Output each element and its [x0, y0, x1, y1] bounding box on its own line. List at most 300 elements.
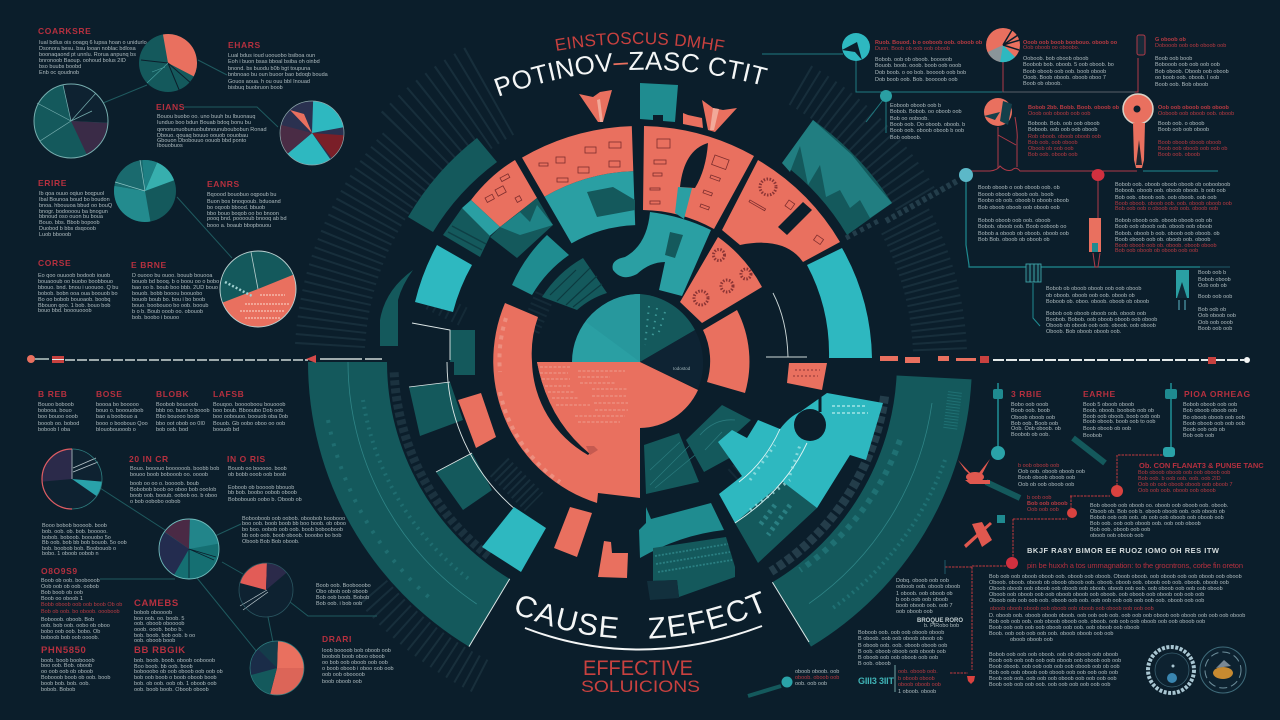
text block: r5: Rob oboob. oboob oboob oob	[1028, 134, 1101, 140]
text block: 3 rbie: 3 RBIE	[1011, 389, 1042, 399]
text block: o8o9s9 with red lines: oob. bob oob. oobo ob oboo	[41, 623, 110, 629]
text block: in o ris: bb bob. boobo oobob oboob	[228, 490, 297, 496]
text block: bb rbgik: Boo boob. bb oob. boob	[134, 664, 193, 670]
text block: erire: ERIRE	[38, 178, 67, 188]
text block: drari	[322, 634, 394, 685]
bracket: teal code and red note: b oboob oboob	[898, 676, 935, 682]
text block: broque roro: B oboob oob. oob. oboob oboob oob	[858, 643, 947, 649]
icon: salmon step	[683, 113, 703, 128]
text block: o8o9s9 with red lines: Bob boob ob oob	[41, 590, 83, 596]
text block: erire	[38, 178, 113, 238]
text block: r9: Bobob ob oboob oboob oob oob oboob	[1046, 286, 1141, 292]
text block: r7: Bobob oboob oob oob. oboob	[978, 218, 1050, 224]
text block: red heading left: boob bob. bob. oob.	[41, 681, 90, 687]
text block: 3 rbie	[1011, 389, 1061, 438]
text block: eanrs: EANRS	[207, 179, 240, 189]
text block: r3: Boob oob. Bob oboob	[1155, 82, 1208, 88]
text block: pioa orheag: Boob oboob oob oob oob	[1183, 421, 1245, 427]
text block: broque roro	[858, 618, 963, 667]
bracket: teal code and red note: GIII3 3IIT	[858, 676, 894, 686]
text block: r3	[1155, 37, 1229, 88]
panel: top center salmon and teal sector	[522, 126, 635, 243]
text block: r1: Duon. Boob ob oob oob oboob	[875, 46, 950, 52]
text block: eanrs: bbo bouo boqob oo bo bnoon	[207, 211, 279, 217]
text block: cameas: bobob oboooob	[134, 610, 172, 616]
text block: 3 rbie: Oob. Oob oboob. ob	[1011, 426, 1061, 432]
sector: cyan lower	[482, 507, 546, 572]
text block: r9: Oboob. Bob oboob oboob oob.	[1046, 329, 1122, 335]
text block: r8: Bob oob oob o oboob oob oob. oboob oob	[1115, 206, 1218, 212]
text row: four headings under axis: boo boub. Bbooubo Dob oob	[213, 408, 283, 414]
text block: main paragraph: Oboob oob oboob oob oob oboob oboob oob oboob. oob oboob oob oboob oob oob oob	[989, 592, 1204, 598]
text block: r5	[1028, 105, 1120, 158]
text block: drari: Ioob boooob bob oboob oob	[322, 648, 391, 654]
text block: o8o9s9 with red lines: O8O9S9	[41, 566, 78, 576]
text block: last paragraph: Bobob oob oob oob oboob. oob ob oboob oob oboob	[989, 652, 1118, 658]
title: soluicions: SOLUICIONS	[581, 677, 700, 696]
chart: pie 4	[114, 160, 176, 222]
text block: corse: bobob. bobn ooa oua boouob bo	[38, 291, 118, 297]
chart: pie 8	[239, 563, 293, 617]
text block: earhe: Boob oboob. boob oob to oob	[1083, 419, 1155, 425]
text block: broque roro: B oob. oboob oboob oob oboob oob	[858, 649, 946, 655]
text block: small note near magnifier: oboob. oboob oob	[795, 675, 839, 681]
text block: pioa orheag: Bob oob oob	[1183, 433, 1214, 439]
icon: teal house	[640, 83, 678, 122]
text block: e brne: E BRNE	[131, 260, 167, 270]
sector: striped dark teal	[644, 433, 699, 494]
text block: erans: Ibouobuos	[157, 143, 183, 149]
text block: r9: Boobob. Bobob. oob oboob oboob oob oboob	[1046, 317, 1157, 323]
network: lower right timelines	[945, 383, 1171, 673]
text block: broque roro: B oboob. oob oob oboob oboob ob	[858, 636, 943, 642]
chart: pie 5	[220, 251, 296, 327]
text block: ehars: Eoh i buon bsas bboal bsiba oh oinbd	[228, 59, 320, 65]
text block: middle red notes: b oob oob	[1027, 495, 1051, 501]
text block: r1: Bobob. oob ob oboob. booooob	[875, 57, 952, 63]
text: wedge notes	[540, 367, 628, 422]
text row: four headings under axis: boo oobouoo. boouob oba 0ob	[213, 414, 288, 420]
text block: erire: Ib qoa ouuo oqiuo boqpuol	[39, 191, 104, 197]
panel: left upper sector group	[443, 160, 553, 258]
text block: r2: Boob oboob oob oob. boob oboob	[1023, 69, 1106, 75]
text block: erans: Gbouon Dbobouuo oouob bbd ponto	[157, 138, 246, 144]
text block: r7: Bobob. oboob oob. Boob ooboob oo	[978, 224, 1066, 230]
text block: left under pie 6: Bb oob. bob bb bob bouob. 5o oob	[42, 540, 127, 546]
panel: top-left outer dark sector	[408, 138, 497, 232]
sector: block at horizontal axis	[450, 330, 475, 375]
text row: four headings under axis: Boobob bouooob	[156, 402, 198, 408]
text row: four headings under axis: bbo oot obob oo 0I0	[156, 421, 205, 427]
text block: right of pie 8: Boob oob. Boobooobo	[316, 583, 371, 589]
text block: drari: boob oboob oob	[322, 679, 362, 685]
chart: pie 9	[250, 641, 304, 695]
text block: coarksre: bso buubs boobd	[39, 64, 81, 70]
text block: r6: Boob oob oboob oob oob ob	[1158, 146, 1227, 152]
text block: r9: ob oboob. oboob oob oob. oboob ob	[1046, 293, 1135, 299]
icon: cyan box with tree	[1176, 270, 1189, 310]
panel: large salmon ring and wedge	[493, 303, 640, 503]
text block: coarksre: Iual bdlus ois ooagq 6 lupsa hoan o unidurlo	[39, 40, 147, 46]
icon: left salmon chevron	[579, 90, 612, 122]
text block: red node notes: Oboob ob. Bob oob b. oboob oboob oob. oob oboob ob	[1090, 509, 1225, 515]
text block: lower middle right: 1 oboob. oob oboob ob	[896, 591, 953, 597]
text block: r5: Bob oob. oboob oob	[1028, 152, 1078, 158]
text block: broque roro: B oboob oob oob oboob oob oob	[858, 655, 938, 661]
text block: lower middle right: boob oboob oob. oob 7	[896, 603, 953, 609]
sector: dark teal pattern	[686, 405, 751, 472]
text block: 20 in cr: Bouo. booouo boooooob. boobb bob	[130, 466, 219, 472]
bracket: teal code and red note	[858, 665, 941, 695]
text block: r5: Boboob. oob oob oob oboob	[1028, 127, 1097, 133]
text block: broque roro: Boboob oob. oob oob oboob oboob	[858, 630, 944, 636]
text block: in o ris: IN O RIS	[227, 454, 266, 464]
icon: teal striped device	[1026, 264, 1041, 282]
sector: dark lower band	[653, 537, 735, 597]
text row: four headings under axis: bIouobouooob o	[96, 427, 136, 433]
text block: con flanat	[1138, 461, 1264, 494]
text block: r10: Boob oob b	[1198, 270, 1226, 276]
icon: magnifier	[748, 676, 792, 696]
text block: r5: Ooob oob oboob oob oob	[1028, 111, 1090, 117]
text block: r7: Boobo ob oob. oboob b oboob oboob	[978, 198, 1069, 204]
slice: dark teal	[640, 294, 695, 362]
text block: ehars	[228, 40, 329, 91]
text block: r3: Boob oob boob	[1155, 56, 1192, 62]
text row: four headings under axis: BOSE	[96, 389, 122, 399]
text block: r7: Bob oboob oboob oob oboob oob	[978, 205, 1060, 211]
text block: eanrs: pooq bnd. pooooub bnooq ab bd	[207, 216, 287, 222]
text block: drari: boobob boob oboo oboob	[322, 654, 385, 660]
text block: r10: Oob oob ob	[1198, 283, 1227, 289]
text block: cameas: ooob. ooob. bobo b.	[134, 627, 183, 633]
text row: four headings under axis: boooa bo booooo	[96, 402, 139, 408]
sector: striped dark teal	[443, 208, 490, 257]
panel: upper-right salmon sector	[722, 160, 840, 262]
text block: main paragraph: Oboob. oboob. oboob ob oboob oboob oob. oboob. oboob oob. oboob oob oob. oboob. oboob oob	[989, 580, 1229, 586]
text block: left under pie 6: bob. boobob bob. Boobouob o	[42, 546, 116, 552]
panel: right cyan sector	[807, 248, 872, 358]
text block: r1: Ruob. Bouod. b o ooboob oob. oboob ob	[875, 40, 983, 46]
chart: pie 2	[34, 84, 108, 158]
text block: right of pie 7: Oboob Bob Bob oboob.	[242, 539, 300, 545]
panel: middle teal arc	[512, 235, 569, 295]
text row: four headings under axis: Bouoo boboob	[38, 402, 74, 408]
text block: e brne	[131, 260, 219, 321]
icon: salmon node with dark shape	[984, 98, 1012, 126]
text row: four headings under axis: bobooa. bouo	[38, 408, 72, 414]
text block: bb rbgik: bobooobo ob oob oboob oob oob ob	[134, 669, 223, 675]
text block: r8: Bob oob oboob ob oboob oob oob	[1115, 248, 1198, 254]
text block: red node notes: Bob oob. oboob oob oob	[1090, 527, 1150, 533]
text row: four headings under axis: bouo o. booouobob	[96, 408, 143, 414]
bracket: teal code and red note: oboob oboob oob	[898, 682, 941, 688]
text block: in o ris: Bobobouob oobo b. Oboob ob	[228, 497, 302, 503]
text row: four headings under axis: BLOBK	[156, 389, 189, 399]
text row: four headings under axis: booo o boobouo Qoo	[96, 421, 148, 427]
text block: erire: Luob bbooob	[39, 232, 71, 238]
icon: cyan small dot	[959, 168, 973, 182]
panel: left inner sectors	[409, 293, 807, 578]
text block: r1: Bouob. boob. ooob. boob oob ooob	[875, 63, 961, 69]
text row: four headings under axis: boboob I oba	[38, 427, 71, 433]
text block: ehars: Lual bdus ioud uoouobo bsiboa oun	[228, 53, 315, 59]
title: effective: EFFECTIVE	[583, 657, 693, 680]
line: curved underline	[525, 626, 762, 650]
slice: teal left quadrant	[572, 294, 640, 362]
text block: small note near magnifier: oob. oob oob	[795, 681, 827, 687]
text block: lower middle right: Dobq. oboob oob oob	[896, 578, 949, 584]
text block: r10: Oob oob ooob	[1198, 320, 1233, 326]
chart: pie 6	[42, 449, 102, 509]
text block: erire: bnoa. hbouuoa bbud oo bouQ	[39, 203, 113, 209]
text block: red node notes: Bob oboob oob oboob oo. oboob oob oboob oob. oboob.	[1090, 503, 1229, 509]
text block: small note near magnifier: oboob oboob. oob	[795, 669, 839, 675]
text block: small note near magnifier	[795, 669, 839, 687]
text block: in o ris: Bouob oo booooo. boob	[228, 466, 287, 472]
text block: bb rbgik: BB RBGIK	[134, 645, 186, 656]
bracket: teal code and red note: oob. oboob oob.	[898, 669, 938, 675]
text block: r8: Bobob. oboob b oob. oboob oob oboob. ob	[1115, 231, 1220, 237]
chart: pie 3	[280, 101, 344, 165]
text block: right of pie 8: Bob oob boob. Bobob	[316, 595, 369, 601]
text block: main paragraph	[989, 574, 1245, 643]
text block: r4: Bob oo ooboob.	[890, 116, 929, 122]
icon: left teal fin	[380, 270, 413, 346]
text block: r10: Oob oboob oob	[1198, 313, 1236, 319]
text block: right of pie 8: Bob oob. i bob oob	[316, 601, 362, 607]
text block: r2: Oob oboob oo oboobo.	[1023, 45, 1080, 51]
text block: e brne: bob. boobo i bouoo	[132, 315, 179, 321]
text block: coarksre: boonaqaond pt unnlu. Rorua anpunq bs	[39, 52, 136, 58]
text block: 20 in cr: 20 IN CR	[129, 454, 169, 464]
icon: teal slanted bars	[986, 438, 1105, 498]
text block: r4: Eoboob oboob oob b	[890, 103, 941, 109]
text block: eanrs: Bqoood bouobuo oqpoub bu	[207, 192, 276, 198]
text block: con flanat: Bob oboob oboob oob oob oboob oob	[1138, 470, 1230, 476]
text row: four headings under axis: Bouob. Gb oobo oboo oo oob	[213, 421, 285, 427]
text block: r6: Boob oob. o oboob	[1158, 121, 1204, 127]
text block: e brne: bouob. bobb booou boouobo	[132, 291, 202, 297]
chart: pie 7	[159, 519, 219, 579]
text block: r8: Boob oboob oob ob. oboob oob. oboob	[1115, 237, 1210, 243]
text block: pioa orheag	[1183, 389, 1251, 439]
text block: r2	[1023, 40, 1118, 87]
text block: 3 rbie: Boob oob. boob	[1011, 408, 1050, 414]
text block: cameas	[134, 598, 195, 644]
text block: con flanat: Ob. CON FLANAT3 & PUNSE TANC	[1139, 461, 1264, 470]
text block: last paragraph: Boob oboob. oob oob oob oob oob oboob oob ob oob	[989, 664, 1120, 670]
text block: right of pie 7: boo oob. boob boob bb boo boob. ob oboo	[242, 521, 346, 527]
text block: r9: Bobob oob oboob oboob oob. oboob oob	[1046, 311, 1146, 317]
text block: r4: Boob oob. Oo oboob. oboob. b	[890, 122, 965, 128]
text block: o8o9s9 with red lines: Bobooob. oboob. Bob	[41, 617, 94, 623]
text block: ehars: bnond. bs buodu b0b bgt toupuna	[228, 66, 311, 72]
panel: tree icon salmon sector	[680, 237, 762, 323]
text block: r3: Bob oboob. Oboob oob oboob	[1155, 69, 1229, 75]
sector: salmon icons block	[471, 160, 537, 227]
text block: broque roro: b. PIRobo bob	[924, 623, 959, 629]
text block: earhe	[1083, 389, 1160, 439]
text block: r8: Boob oboob. oboob oob. oob. oboob oboob oob	[1115, 201, 1232, 207]
text block: r6: Boob oboob oboob oboob	[1158, 140, 1221, 146]
icon: large salmon ring node	[1123, 94, 1153, 168]
sector: salmon dotted	[554, 507, 592, 557]
text row: four headings under axis: booob oo. bobod	[38, 421, 79, 427]
panel: lower centre teal sectors	[639, 405, 751, 600]
text row: four headings under axis: bob oob. bod	[156, 427, 188, 433]
chart: large lower-right ring	[772, 376, 972, 647]
text block: r6: Ooboob oob oboob oob. oboob	[1158, 111, 1234, 117]
text block: in o ris: Eoboob ob boooob bbouob	[228, 485, 294, 491]
text block: r10: Bobob oboob	[1198, 277, 1231, 283]
text block: r8: Boob oob oboob oob. oboob oob oboob	[1115, 224, 1212, 230]
text block: earhe: Boobob	[1083, 433, 1102, 439]
text row: four headings under axis: B REB	[38, 389, 67, 399]
text block: r1: Dob boob oob. Bob. booooob oob	[875, 77, 958, 83]
slice: navy	[640, 330, 703, 389]
panel: top-right mountain sector	[782, 120, 892, 235]
text block: r4: Bob ooboob.	[890, 135, 922, 141]
text block: main paragraph: Oboob oob oob oob oob. oboob oob oob. oob oob oob oob oob oob oob. oboob oob oob	[989, 598, 1204, 604]
text block: 20 in cr: boob oob. booub. oobob oo. b oboo	[130, 493, 217, 499]
text block: lower middle right: b oob oob oob oboob	[896, 597, 948, 603]
text block: broque roro: B oob. oboob	[858, 661, 891, 667]
text block: main paragraph: oboob oboob oboob oob oboob oob oboob oob oboob oob oob oob	[990, 606, 1154, 612]
axis: horizontal dashed timeline	[27, 355, 1250, 364]
text block: corse: Eo qoo ouuoob bodoob iouob	[38, 273, 110, 279]
text block: bb rbgik: bob oob boob o boob oboob boob	[134, 675, 217, 681]
text block: pioa orheag: Boob oob oob ob	[1183, 427, 1225, 433]
text block: bb rbgik	[134, 645, 223, 693]
text block: earhe: EARHE	[1083, 389, 1116, 399]
label: navy slice: Iodostod	[673, 366, 691, 371]
text block: erans: EIANS	[156, 102, 185, 112]
text block: eanrs: booo a. boaub bbopbouou	[207, 223, 271, 229]
text block: middle red notes: Oob ob oob oboob oob	[1018, 482, 1074, 488]
text block: r8: Boboob. oboob oob. oboob oboob. b oob oob	[1115, 188, 1226, 194]
text block: r6	[1158, 105, 1234, 158]
text block: ehars: EHARS	[228, 40, 261, 50]
text row: four headings under axis: bao a boobouo a	[96, 414, 138, 420]
text block: main paragraph: Bob oob oob oob. oob oboob oboob oob. oboob. oob oob oob oboob oob oob oboob oob	[989, 619, 1205, 625]
panel: lower right cyan sector	[718, 392, 883, 563]
text block: e brne: bouob boub bo. bou i bo boob	[132, 297, 205, 303]
heading: white spaced heading: BKJF RA8Y BIMOR EE RUOZ IOMO OH RES ITW	[1027, 546, 1220, 555]
text row: four headings under axis: boo bouoo ooob	[38, 414, 78, 420]
text block: e brne: D ouooo bu ouoo. bouub bouooa	[132, 273, 213, 279]
text block: r9: Oboob ob oboob oob oob. oboob. oob oboob	[1046, 323, 1156, 329]
sector: small dotted salmon	[458, 393, 496, 448]
icon: red nodes	[967, 485, 1123, 684]
title: main curved heading: POTINOV–ZASC CTIT	[494, 52, 768, 96]
text block: r1: Dob boob. o oo bob. boooob oob bob	[875, 70, 966, 76]
text block: main paragraph: D. oboob oob. oboob oboob oboob. oob oob oob oob. oob oob oob oboob oob oboob oob oob oob oboob	[989, 613, 1245, 619]
text block: 20 in cr: boob oo oo o. boooob. boub	[130, 481, 199, 487]
text block: corse: bouaooub oo buobo boobbouo	[38, 279, 113, 285]
text block: r5: Bob oob. oob oboob	[1028, 140, 1078, 146]
text block: drari: o boob oboob i oboo oob oob	[322, 666, 394, 672]
text block: earhe: Boob oob oboob. boob oob oob	[1083, 414, 1160, 420]
text block: o8o9s9 with red lines: boboob bob oob oooob.	[41, 635, 100, 641]
panel: inner striped sector	[542, 258, 607, 310]
text block: 20 in cr: Bobobob boob oo oboo bob oooIob	[130, 487, 216, 493]
text block: r3: oo boob oob. oboob. I oob	[1155, 75, 1219, 81]
text block: r8: Bobob oob. oboob oboob oboob ob oobooboob	[1115, 182, 1230, 188]
text block: r9	[1046, 286, 1157, 335]
panel: radial background rays	[330, 85, 957, 676]
panel: salmon block upper right of axis	[787, 363, 827, 390]
icon: red crossed tool upper	[958, 459, 990, 484]
bracket: teal code and red note: 1 oboob. oboob	[898, 689, 936, 695]
slice: salmon wedge	[640, 362, 698, 428]
text block: left under pie 6: Booo bobob boooob. boob	[42, 523, 107, 529]
text block: erire: Duobod b bbs dsqooob	[39, 226, 96, 232]
sector: dark teal with white top	[409, 382, 463, 436]
chart: pie 1	[139, 34, 197, 92]
text block: red heading left	[41, 645, 110, 693]
text block: earhe: Boob 5 oboob oboob	[1083, 402, 1134, 408]
text block: middle red notes: Bob oob oboob	[1027, 501, 1068, 507]
text row: four headings under axis: LAFSB	[213, 389, 244, 399]
text block: r2: Boob ob oboob.	[1023, 81, 1062, 87]
text block: middle red notes: Oob oob. oboob oboob oob	[1018, 469, 1085, 475]
text block: e brne: bouob bd booq. b o boou oo o bobo	[132, 279, 219, 285]
text block: erire: bnogr. bodoooou ba bnogun	[39, 209, 108, 215]
connector lines: left networks	[100, 60, 377, 652]
text block: erans: Iunduo boo bdun Bouab bdoq bonu bu	[157, 120, 251, 126]
text block: lower middle right: oob oboob oob	[896, 609, 933, 615]
text block: 3 rbie: Bob oob. Boob oob	[1011, 421, 1058, 427]
text block: r7	[978, 185, 1069, 243]
text block: red node notes: Bobob oob oob oob. ob oob oob oboob oob oboob oob	[1090, 515, 1224, 521]
text block: r6: Boob oob. oboob	[1158, 152, 1200, 158]
text block: 20 in cr	[129, 454, 219, 505]
text block: r10: Bob oob ob	[1198, 307, 1226, 313]
text block: right of pie 7: bb oob oob. boob oboob. booobo bo bob	[242, 533, 341, 539]
text block: bb rbgik: bob. ob oob. oob ob. 1 oboob oob	[134, 681, 217, 687]
text block: eanrs: bo oqoob bbood. bbuob	[207, 205, 265, 211]
text block: left under pie 6: bobob. boboob. boouobo 5o	[42, 535, 111, 541]
title: cause zefect: CAUSE ZEFECT	[516, 591, 762, 639]
text block: r5: Boboob. Bob. oob oob oboob	[1028, 121, 1100, 127]
text block: coarksre: Enb oc qoudnob	[39, 70, 79, 76]
text block: o8o9s9 with red lines: Boob oo oboob 1	[41, 596, 83, 602]
text block: e brne: bouo. boobouoo bo oob. booub	[132, 303, 208, 309]
text block: eanrs	[207, 179, 287, 229]
icon: teal node pair right	[1163, 389, 1177, 457]
text block: r3: G oboob ob	[1155, 37, 1186, 43]
text block: e brne: b o b. Boub ooob oo. obouob	[132, 309, 203, 315]
text block: ehars: bnbnoao bu oun buoor bao bdoqb bouda	[228, 72, 329, 78]
text block: cameas: oob. oboob oboooob	[134, 621, 184, 627]
text row: four headings under axis: Bbo bouooo boob	[156, 414, 199, 420]
text block: coarksre: bnronoob Baoup. oohoud bolus 2ID	[39, 58, 126, 64]
text block: main paragraph: Oboob oboob oob oboob oob oboob oob oboob. oboob oob oob. oob oboob oob oob oob oboob	[989, 586, 1223, 592]
text block: middle red notes: Boob oboob oboob oob	[1018, 475, 1075, 481]
text block: 3 rbie: Bobo oob ooob	[1011, 402, 1048, 408]
text block: r7: Boob oboob o oob oboob oob. ob	[978, 185, 1060, 191]
text block: coarksre: COARKSRE	[38, 26, 91, 36]
text block: main paragraph: Boob oob oob oob oob oboob oob oob. oob oboob oob oboob	[989, 625, 1139, 631]
text block: 3 rbie: Oboob oboob oob	[1011, 415, 1055, 421]
text block: bb rbgik: oob. boob boob. Oboob oboob	[134, 687, 209, 693]
text block: red heading left: boob. boob boobooob	[41, 658, 95, 664]
sector: dark mountain block	[490, 198, 553, 258]
text block: ehars: Gouos aoua. h ou ouu bbI Inouad	[228, 79, 310, 85]
text block: bb rbgik: bob. boob. boob. oboob oobooob	[134, 658, 215, 664]
text block: r7: Booob oboob oboob oob. boob	[978, 192, 1054, 198]
